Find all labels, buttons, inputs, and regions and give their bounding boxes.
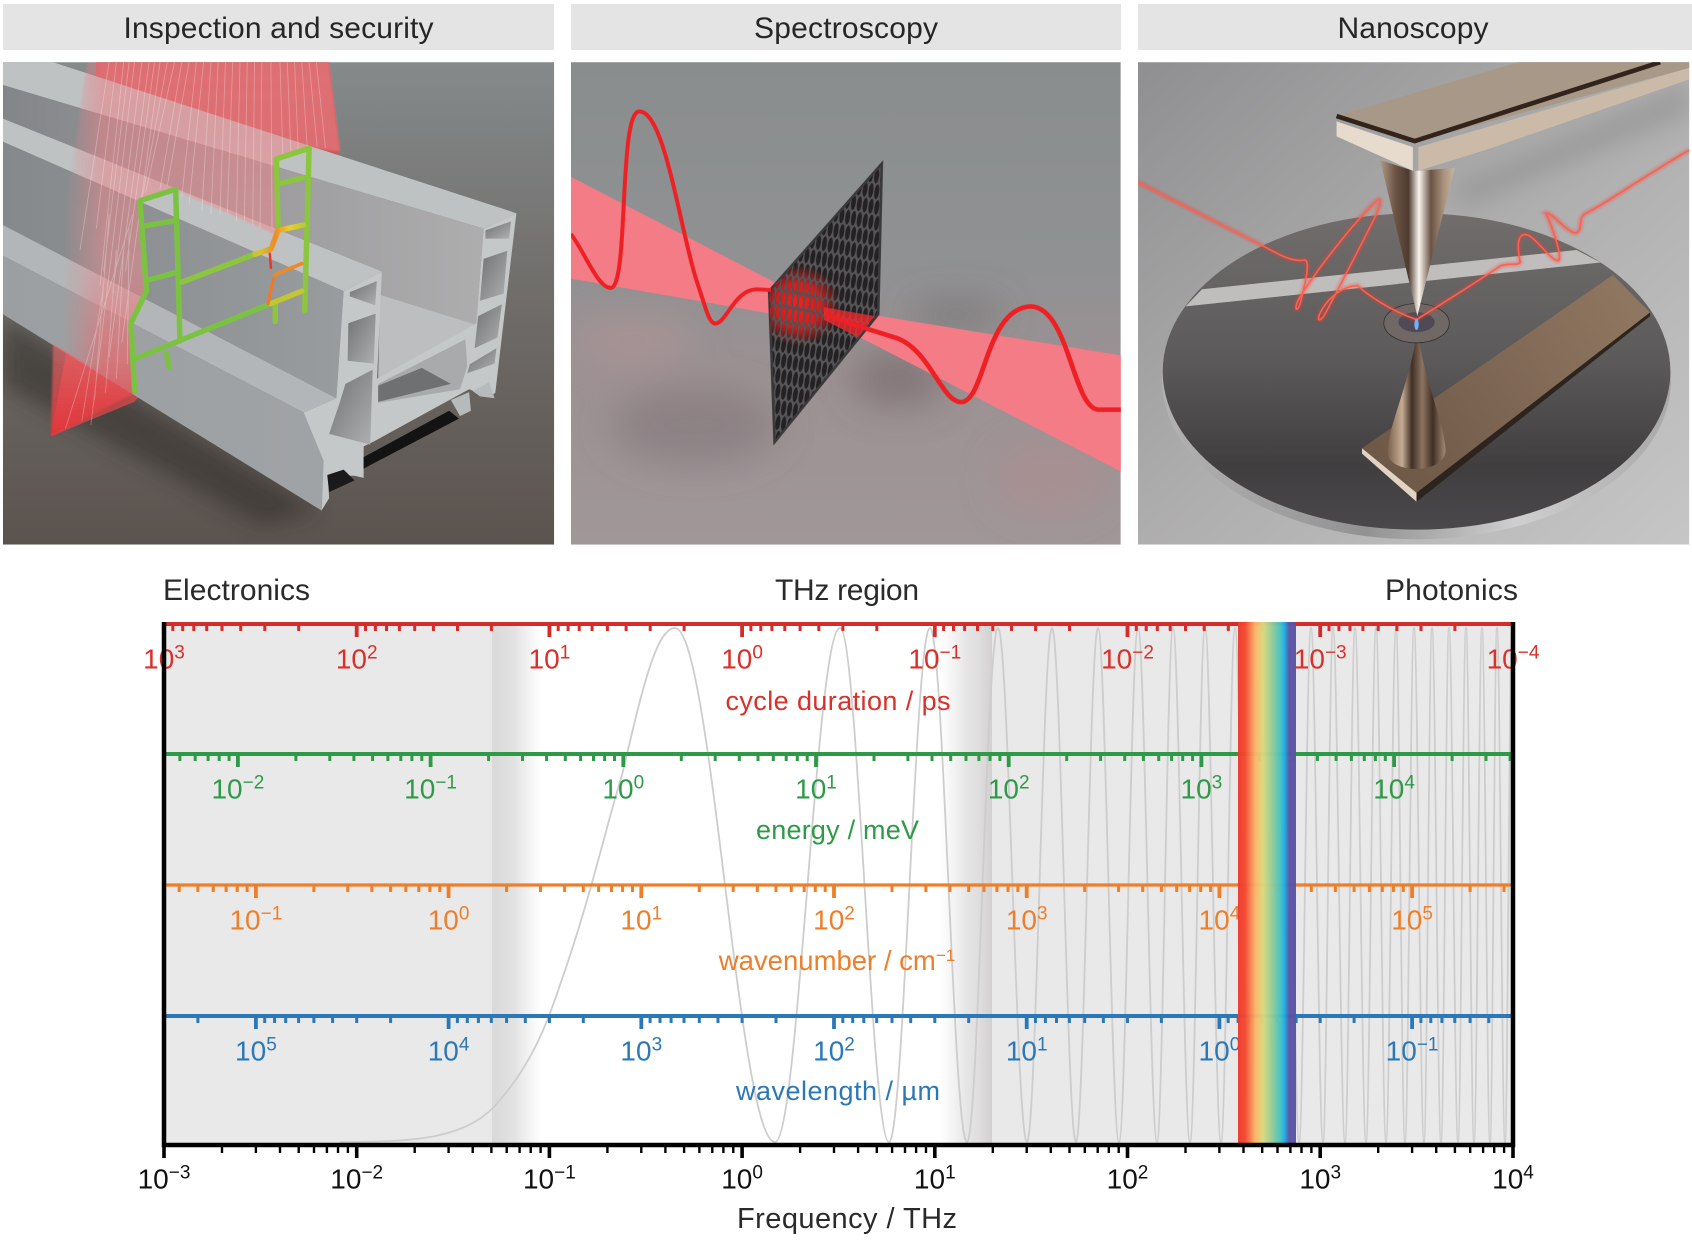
frequency axis title: Frequency / THz [737, 1203, 957, 1235]
green axis line and ticks [103, 754, 1578, 767]
red tick labels: 10 [1101, 644, 1132, 674]
green tick labels: 1 [826, 772, 837, 794]
frequency axis tick labels [138, 1162, 1534, 1194]
metasurface plate [769, 164, 882, 442]
orange tick labels: 5 [1422, 904, 1433, 924]
panel: spectroscopy [571, 4, 1121, 545]
blue tick labels: 0 [1230, 1034, 1240, 1056]
red tick labels: 10 [721, 644, 752, 674]
panel: nanoscopy [1138, 4, 1692, 545]
red tick labels [143, 642, 1540, 674]
red tick labels: 3 [174, 642, 185, 664]
orange tick labels: 10 [1199, 904, 1230, 936]
frequency axis tick labels: 10 [1299, 1164, 1330, 1194]
axis: wavenumber [166, 883, 1511, 970]
orange tick labels: 10 [428, 904, 459, 936]
red tick labels: 10 [336, 644, 367, 674]
blue caption: wavelength / µm [735, 1076, 940, 1106]
axis: energy [103, 754, 1578, 845]
frequency axis tick labels: 10 [1492, 1164, 1523, 1194]
transmitted red wedge [824, 307, 875, 337]
red axis line and ticks [164, 624, 1513, 637]
orange tick labels: 10 [229, 904, 261, 936]
incoming beam [571, 177, 775, 314]
green tick labels: −2 [243, 772, 264, 794]
green tick labels: 10 [211, 774, 243, 804]
red tick labels: 10 [143, 644, 174, 674]
blue tick labels: 10 [813, 1036, 844, 1066]
red tick labels: 1 [560, 642, 570, 664]
electronics background [164, 624, 492, 1145]
red tick labels: 10 [529, 644, 560, 674]
blue tick labels: 10 [1199, 1036, 1230, 1066]
red caption: cycle duration / ps [726, 686, 950, 716]
blue tick labels [235, 1034, 1439, 1066]
blue tick labels: 5 [266, 1034, 277, 1056]
frequency axis tick labels: 2 [1138, 1162, 1148, 1184]
blue tick labels: 4 [459, 1034, 470, 1056]
orange tick labels: 1 [652, 904, 662, 924]
green tick labels: 10 [602, 774, 634, 804]
focus spot [1414, 319, 1419, 330]
substrate disc [1162, 213, 1671, 539]
green tick labels: 2 [1019, 772, 1030, 794]
orange tick labels: 2 [844, 904, 855, 924]
red tick labels: 2 [367, 642, 378, 664]
red beam behind profile [51, 62, 340, 436]
orange tick labels: 4 [1230, 904, 1241, 924]
green THz cross-section outline [131, 148, 309, 391]
green caption: energy / meV [756, 815, 919, 845]
incoming waveform [571, 111, 771, 324]
upper cantilever [1337, 62, 1689, 171]
frequency axis tick labels: 10 [914, 1164, 945, 1194]
illustration: near-field nanoscopy tips on substrate [1138, 62, 1689, 545]
under-profile shadow and feet [327, 382, 495, 492]
green tick labels [211, 772, 1415, 804]
orange tick labels [229, 904, 1433, 936]
orange tick labels: 10 [620, 904, 652, 936]
illustration: THz pulse through metasurface [571, 62, 1121, 545]
profile end face [304, 213, 516, 510]
orange tick labels: 0 [459, 904, 469, 924]
visible spectrum rainbow band [1238, 622, 1296, 1143]
blue axis line and ticks [72, 1016, 1547, 1029]
chirped wave curve [340, 628, 1512, 1142]
label: electronics: Electronics [163, 574, 310, 607]
outgoing beam [825, 307, 1121, 471]
transmitted waveform [825, 306, 1121, 410]
lower bar electrode [1362, 275, 1650, 502]
axis: cycle duration [143, 624, 1540, 716]
photonics background [992, 624, 1513, 1145]
green tick labels: 3 [1212, 772, 1222, 794]
red tick labels: 0 [752, 642, 763, 664]
green tick labels: 4 [1404, 772, 1415, 794]
frequency axis ticks [164, 1146, 1513, 1158]
frequency axis tick labels: 3 [1330, 1162, 1341, 1184]
sample ring [1384, 304, 1449, 343]
frequency axis tick labels: 10 [721, 1164, 752, 1194]
blue tick labels: 3 [652, 1034, 662, 1056]
red tick labels: 10 [1294, 644, 1325, 674]
orange tick labels: 10 [1391, 904, 1422, 936]
channel floor [378, 295, 475, 379]
axis: wavelength [72, 1016, 1547, 1106]
orange tick labels: −1 [261, 904, 282, 924]
blue tick labels: 10 [1006, 1036, 1037, 1066]
frequency axis tick labels: 10 [330, 1164, 361, 1194]
red tick labels: −1 [940, 642, 961, 664]
orange caption: −1 [936, 946, 955, 965]
red tick labels: −4 [1518, 642, 1540, 664]
blue tick labels: 10 [428, 1036, 459, 1066]
red tick labels: −3 [1325, 642, 1347, 664]
heading: inspection and security: Inspection and security [124, 12, 434, 45]
label: THz region: THz region [775, 574, 919, 607]
blue tick labels: 10 [620, 1036, 652, 1066]
illustration: window profile with THz scan [3, 62, 554, 545]
green tick labels: 10 [404, 774, 435, 804]
frequency axis tick labels: 10 [523, 1164, 554, 1194]
orange tick labels: 3 [1037, 904, 1048, 924]
heading: spectroscopy [571, 4, 1121, 50]
blue tick labels: 10 [235, 1036, 266, 1066]
frequency axis tick labels: 10 [138, 1164, 169, 1194]
upper tip [1380, 160, 1455, 316]
plot frame: left, right, bottom axes [164, 622, 1513, 1145]
heading: inspection and security [3, 4, 554, 50]
pulsed laser trace [1138, 150, 1689, 320]
label: photonics: Photonics [1385, 574, 1518, 607]
green tick labels: 10 [1181, 774, 1212, 804]
green tick labels: 10 [1373, 774, 1404, 804]
red tick labels: 10 [1487, 644, 1518, 674]
blue tick labels: 2 [844, 1034, 855, 1056]
green tick labels: 10 [795, 774, 826, 804]
orange caption: wavenumber / cm [719, 945, 936, 976]
frequency axis tick labels: 0 [752, 1162, 763, 1184]
heading: spectroscopy: Spectroscopy [754, 12, 938, 45]
blue tick labels: 1 [1037, 1034, 1048, 1056]
back rail [3, 62, 516, 325]
frequency axis tick labels: −3 [169, 1162, 190, 1184]
frequency axis tick labels: 10 [1107, 1164, 1138, 1194]
red tick labels: −2 [1132, 642, 1154, 664]
blue tick labels: −1 [1417, 1034, 1439, 1056]
region labels [163, 574, 1518, 607]
orange tick labels: 10 [813, 904, 844, 936]
heading: nanoscopy: Nanoscopy [1338, 12, 1488, 45]
left transition band [492, 624, 542, 1145]
orange axis line and ticks [121, 885, 1596, 898]
frequency axis tick labels: −2 [361, 1162, 383, 1184]
frequency axis tick labels: −1 [554, 1162, 576, 1184]
frequency axis tick labels: 1 [945, 1162, 956, 1184]
chart: electromagnetic spectrum [72, 622, 1596, 1235]
frequency axis tick labels: 4 [1523, 1162, 1534, 1184]
panel: inspection and security [3, 4, 554, 545]
green tick labels: 10 [988, 774, 1019, 804]
heading: nanoscopy [1138, 4, 1692, 50]
red tick labels: 10 [908, 644, 940, 674]
front rail [3, 119, 382, 511]
green tick labels: −1 [435, 772, 457, 794]
blue tick labels: 10 [1386, 1036, 1417, 1066]
beam over profile [51, 62, 340, 436]
lower tip [1387, 330, 1446, 469]
orange tick labels: 10 [1006, 904, 1037, 936]
right transition band [940, 624, 992, 1145]
green tick labels: 0 [634, 772, 644, 794]
